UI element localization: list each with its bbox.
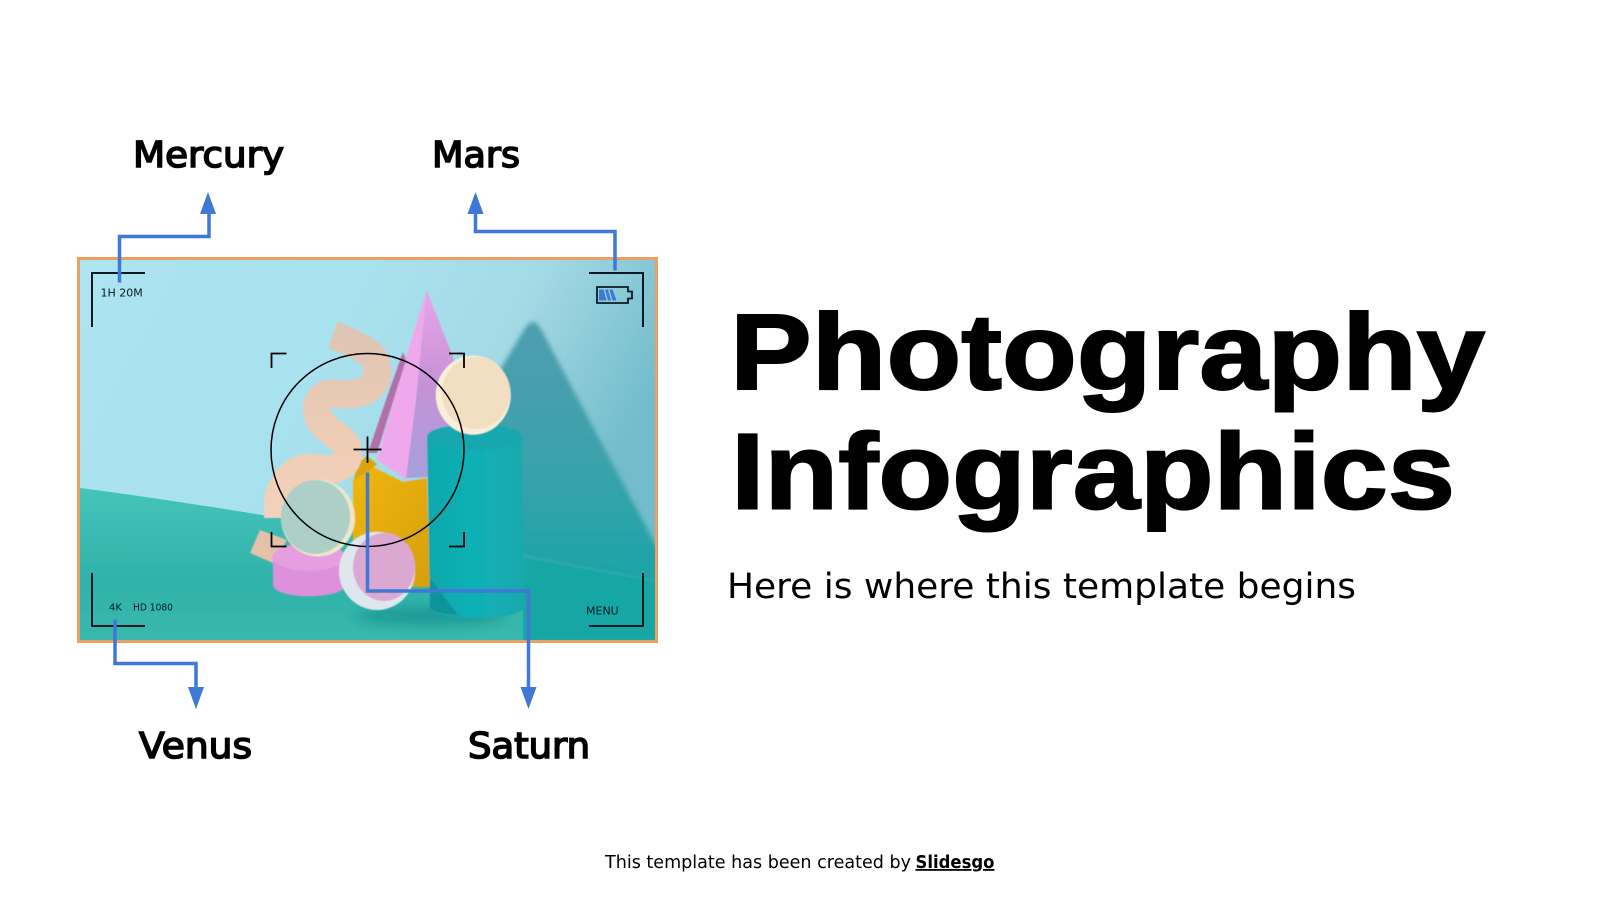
- footer credit: This template has been created by: [604, 852, 911, 873]
- viewfinder corner brackets: [92, 273, 643, 626]
- label: Venus: Venus: [139, 726, 252, 767]
- label: Saturn: Saturn: [468, 726, 590, 767]
- pink cylinder: [273, 558, 346, 596]
- peach squiggle: [278, 335, 377, 518]
- title: Photography: [730, 291, 1485, 412]
- label: Mars: Mars: [432, 135, 520, 176]
- footer credit: Slidesgo: [916, 852, 994, 873]
- green ball: [281, 480, 355, 556]
- arrow: to Venus: [115, 620, 204, 709]
- recording time: 1H 20M: [100, 286, 143, 300]
- title: Infographics: [731, 410, 1455, 532]
- photo panel with orange frame: [79, 259, 660, 641]
- title: [730, 291, 1485, 532]
- resolution readout: [109, 602, 173, 614]
- menu label: MENU: [586, 604, 619, 618]
- photograph: still life of shapes: [80, 260, 660, 640]
- teal cylinder: [427, 424, 524, 618]
- resolution readout: HD 1080: [133, 602, 173, 614]
- battery icon: [597, 287, 632, 303]
- focus ring with crosshair: [271, 354, 464, 546]
- yellow block: [353, 467, 430, 587]
- arrow: to Mercury: [120, 192, 216, 282]
- resolution readout: 4K: [109, 602, 122, 614]
- arrow: to Mars: [468, 192, 615, 270]
- pink ball: [339, 532, 415, 610]
- cream ball: [436, 356, 511, 434]
- pink cone: [406, 290, 454, 478]
- arrow: to Saturn: [368, 472, 536, 709]
- subtitle: Here is where this template begins: [727, 567, 1356, 607]
- label: Mercury: Mercury: [133, 135, 284, 176]
